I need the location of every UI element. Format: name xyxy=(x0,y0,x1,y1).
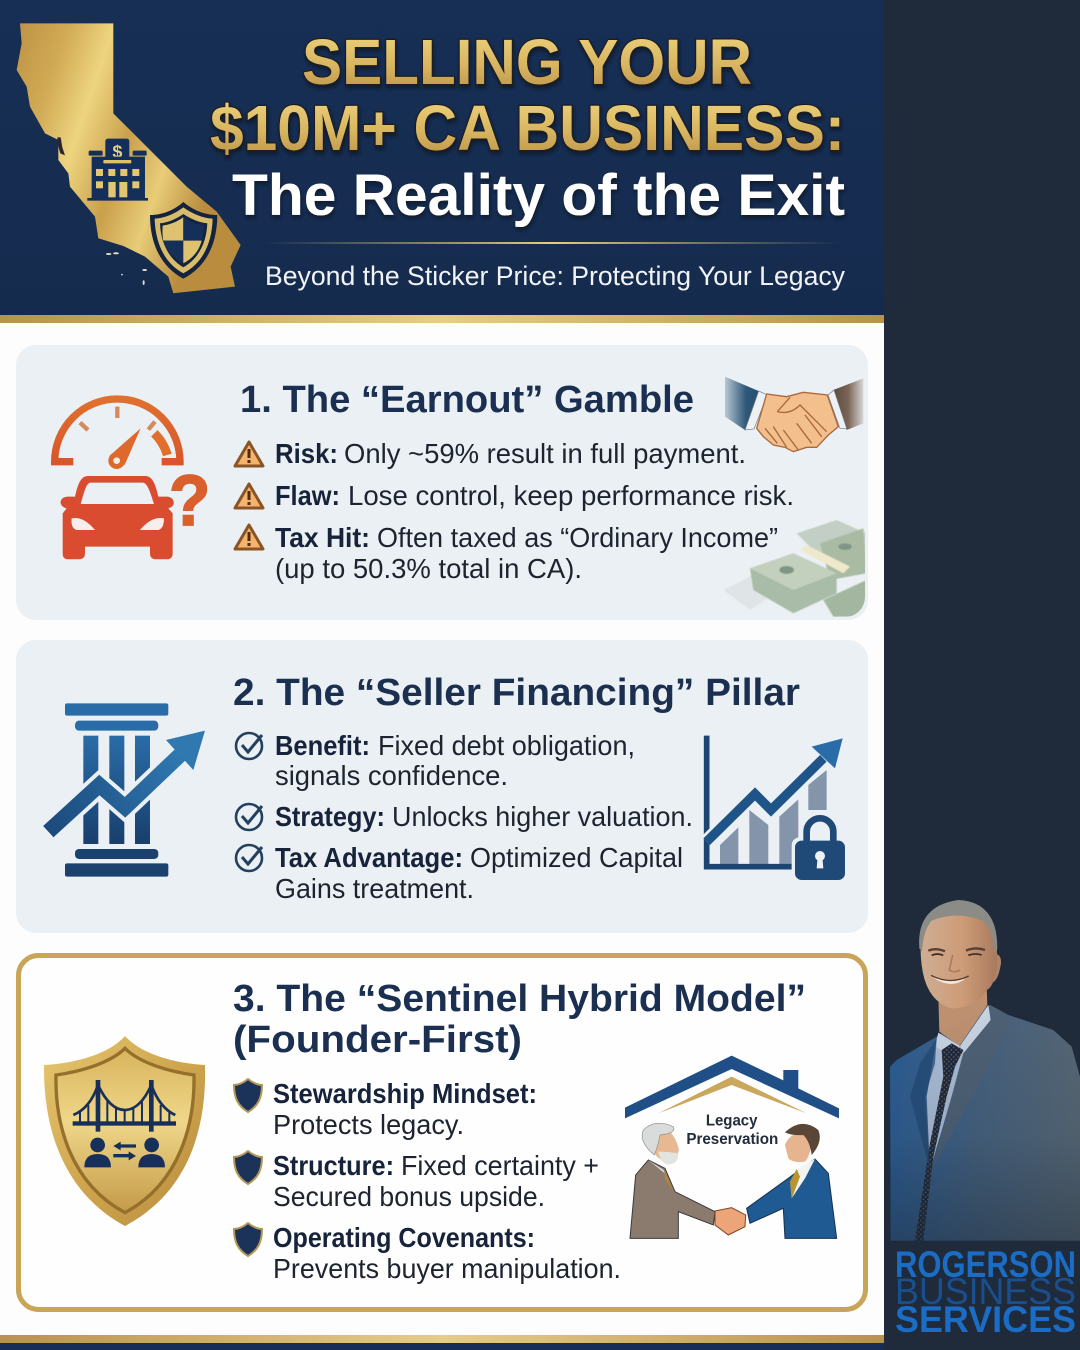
item: structure: Fixed certainty + xyxy=(401,1150,599,1181)
item: operating covenants: Prevents buyer manipulation. xyxy=(273,1253,621,1284)
item: tax advantage xyxy=(236,842,683,904)
white page area xyxy=(0,323,884,1335)
item: tax hit xyxy=(235,522,778,584)
item: risk: Risk: xyxy=(275,438,338,469)
logo text xyxy=(895,1244,1076,1340)
clasped hands xyxy=(715,1208,746,1235)
title: SELLING YOUR xyxy=(302,26,752,98)
panel: seller financing xyxy=(16,640,868,933)
icon: bank building xyxy=(87,139,148,201)
item: flaw: Lose control, keep performance risk. xyxy=(348,480,794,511)
benefit list xyxy=(236,730,693,904)
feature list xyxy=(234,1078,621,1284)
illustration: legacy preservation handshake: Legacy xyxy=(706,1113,758,1130)
subtitle: Beyond the Sticker Price: Protecting Your Legacy xyxy=(265,261,845,291)
icon: growth chart with lock xyxy=(707,736,848,883)
item: operating covenants xyxy=(234,1222,621,1284)
item: benefit: signals confidence. xyxy=(275,760,508,791)
logo text: BUSINESS xyxy=(895,1271,1076,1312)
illustration: legacy preservation handshake xyxy=(625,1056,839,1238)
heading: 3. The “Sentinel Hybrid Model” xyxy=(233,978,806,1020)
icon: bank building: $ xyxy=(112,142,122,162)
title: The Reality of the Exit xyxy=(232,163,845,228)
item: tax advantage: Gains treatment. xyxy=(275,873,474,904)
heading: 1. The “Earnout” Gamble xyxy=(240,379,694,421)
item: structure: Structure: xyxy=(273,1150,394,1181)
item: stewardship mindset xyxy=(234,1078,537,1140)
icon: speedometer and car xyxy=(55,399,210,559)
icon: money stack xyxy=(723,520,867,617)
item: stewardship mindset: Stewardship Mindset: xyxy=(273,1078,537,1109)
item: strategy: Strategy: xyxy=(275,801,385,832)
icon: gold shield with bridge xyxy=(44,1036,205,1226)
item: benefit: Benefit: xyxy=(275,730,370,761)
item: tax advantage: Optimized Capital xyxy=(470,842,683,873)
item: tax hit: Often taxed as “Ordinary Income” xyxy=(377,522,778,553)
item: tax hit: Tax Hit: xyxy=(275,522,370,553)
item: stewardship mindset: Protects legacy. xyxy=(273,1109,464,1140)
item: strategy xyxy=(236,801,693,832)
older man xyxy=(630,1123,715,1238)
illustration: legacy preservation handshake: Preservation xyxy=(686,1131,778,1148)
item: benefit: Fixed debt obligation, xyxy=(378,730,635,761)
title xyxy=(210,26,845,228)
item: tax hit: (up to 50.3% total in CA). xyxy=(275,553,582,584)
icon: speedometer and car: ? xyxy=(169,461,210,541)
item: structure: Secured bonus upside. xyxy=(273,1181,545,1212)
item: strategy: Unlocks higher valuation. xyxy=(392,801,693,832)
side panel xyxy=(884,0,1080,1350)
title: $10M+ CA BUSINESS: xyxy=(210,92,845,164)
item: operating covenants: Operating Covenants: xyxy=(273,1222,535,1253)
California map with icons xyxy=(17,23,241,293)
younger man xyxy=(747,1124,837,1238)
heading xyxy=(233,978,806,1061)
item: flaw: Flaw: xyxy=(275,480,340,511)
heading: (Founder-First) xyxy=(233,1019,522,1061)
header banner xyxy=(0,0,884,323)
item: structure xyxy=(234,1150,599,1212)
panel: sentinel hybrid model xyxy=(18,956,866,1310)
item: risk: Only ~59% result in full payment. xyxy=(344,438,746,469)
panel: earnout gamble xyxy=(16,345,868,620)
heading: 2. The “Seller Financing” Pillar xyxy=(233,672,800,714)
item: benefit xyxy=(236,730,635,791)
item: tax advantage: Tax Advantage: xyxy=(275,842,463,873)
icon: handshake xyxy=(725,377,863,452)
icon: pillar with arrow xyxy=(48,703,205,877)
logo text: SERVICES xyxy=(895,1299,1076,1340)
risk list xyxy=(235,438,794,584)
portrait xyxy=(890,900,1080,1241)
icon: shield xyxy=(150,202,217,279)
bottom gold bar xyxy=(0,1335,884,1350)
